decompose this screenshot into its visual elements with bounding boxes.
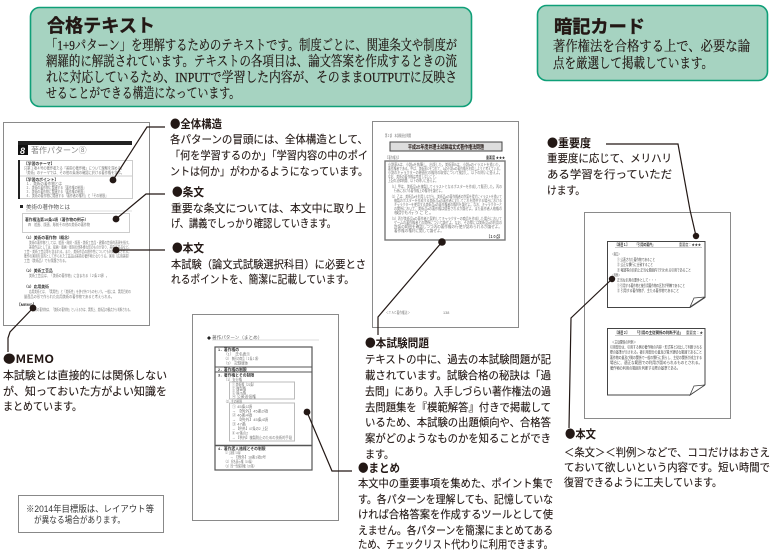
callout: 重要度 bbox=[547, 135, 699, 239]
callout: 本文: れるポイントを、簡潔に記載しています。 bbox=[171, 272, 354, 286]
callout: 全体構造 bbox=[110, 116, 368, 183]
page sample: text page with pattern title: 著作の実用を目的として作られた工芸品は美術の著作物となりうる。実用（応用美術） bbox=[24, 254, 131, 258]
page sample: summary page: → 【例外】複製防止のための技術的手段 bbox=[232, 435, 292, 440]
page sample: past exam question: 第２部 本試験過去問題 bbox=[385, 133, 411, 138]
page sample: text page with pattern title: 量産品の形で作られた応用美術の著作物であると考えられる。 bbox=[24, 294, 114, 299]
page sample: text page with pattern title: 工芸（美術品）でも保護される。 bbox=[24, 258, 68, 263]
panel: 合格テキスト bbox=[30, 8, 472, 106]
text block: 合格テキスト description bbox=[46, 37, 457, 102]
page sample: past exam question: 許諾の範囲を確認しつつ丙の著作権の行使が認められるか論ぜよ。 bbox=[394, 224, 502, 229]
card 1: ＜判例＞ bbox=[612, 272, 620, 278]
page sample: text page with pattern title: 【MEMO】 bbox=[17, 302, 36, 307]
page sample: summary page: ③ 47条 bbox=[232, 422, 246, 426]
page sample: text page with pattern title: 美術作品としては、絵画・版画・彫刻の他多様な形のものがあり、美術工芸品など。 bbox=[29, 244, 131, 250]
panel: 暗記カード bbox=[538, 6, 768, 80]
page sample: past exam question: 複製のポスターを作成する美術品aの著作者に対してこれを提供する場合における bbox=[394, 198, 502, 203]
page sample: text page with pattern title: 著作権法第10条1項（著作物の例示） bbox=[25, 217, 88, 222]
note box bbox=[18, 496, 164, 532]
card 1: ① 引用する著作物と被引用著作物の区別が明瞭であること bbox=[617, 283, 685, 288]
page sample: summary page: ② 46条4項 bbox=[232, 412, 252, 418]
callout: 条文: 重要な条文については、本文中に取り上 bbox=[171, 201, 366, 215]
text block: 合格テキスト description: 網羅的に解説されています。テキストの各項目は、論文答案を作成するときの流 bbox=[46, 53, 457, 70]
page sample: text page with pattern title: ２．美術の著作物に関連する「著作権の制限」 bbox=[26, 185, 86, 190]
page sample: text page with pattern title: １．美術の著作物とは bbox=[26, 181, 62, 186]
callout: まとめ: 本文中の重要事項を集めた、ポイント集で bbox=[358, 476, 553, 490]
page sample: summary page: 1．著作権の bbox=[218, 347, 239, 352]
callout: 本文 (card): ●本文 bbox=[565, 426, 596, 442]
page sample: summary page: ④ 公衆送信権 bbox=[232, 394, 256, 399]
callout: 全体構造: ントは何か」がわかるようになっています。 bbox=[170, 164, 368, 178]
page sample: summary page bbox=[192, 314, 338, 520]
callout: MEMO: ●MEMO bbox=[3, 351, 54, 367]
callout: まとめ: ため、チェックリスト代わりに利用できます。 bbox=[358, 538, 553, 551]
card 1: ③ 報道等の目的上正当な範囲内で行われる引用であること bbox=[617, 268, 691, 272]
page sample: text page with pattern title: 美術の著作物とは bbox=[26, 203, 71, 211]
card 2: 著作物の利用の範囲を判断する際の基準である。 bbox=[610, 366, 680, 370]
page sample: summary page: （1） 氏名表示 bbox=[224, 352, 250, 356]
page sample: text page with pattern title: 工芸・美術工芸品等も含まれる。また、美術作品の創作性についても判断がなされる。 bbox=[24, 249, 131, 254]
page sample: past exam question: キャラクターを使用する美術品aの著作権者の権利を論ぜよ。なお、キャラクターと bbox=[394, 202, 502, 207]
card 2: 際の基準が示される。被引用部分の量及び質が適切な範囲であること bbox=[610, 350, 702, 354]
card 1: 正当な引用の要件として・・・ bbox=[617, 278, 657, 282]
page sample: past exam question: 著作権者である。甲は、美術家Cをつれて、Aの小説aの著作権を利用しようと考えている。 bbox=[388, 166, 502, 171]
page sample: summary page: ① 45条1項 bbox=[232, 404, 252, 409]
text block: 暗記カード description: 点を厳選して掲載しています。 bbox=[553, 55, 713, 72]
card 2: 重要度：★ bbox=[686, 330, 703, 335]
page sample: summary page: （2）主の制限 bbox=[224, 399, 242, 404]
text block: 合格テキスト description: せることができる構造になっています。 bbox=[46, 85, 240, 102]
callout: 本試験問題: 去問題集を『模範解答』付きで掲載して bbox=[365, 400, 551, 414]
card 1: ② 引用する著作物が、主たる著作物であること bbox=[617, 288, 679, 293]
page sample: summary page: （3） 記録媒体 bbox=[224, 360, 248, 366]
leader line bbox=[378, 242, 442, 335]
page sample: text page with pattern title: 美術の著作物は、「美術の著作物」といえるかは、実際上、美術品の観点から判断される。 bbox=[32, 307, 132, 312]
callout: 本文 bbox=[113, 240, 366, 286]
callout: 本文: ●本文 bbox=[172, 240, 204, 256]
page sample: text page with pattern title: 美術の著作物としては、絵画・彫刻・版画・美術工芸品・建築の芸術的表現を指す。 bbox=[29, 240, 131, 245]
callout: 本文: 本試験（論文式試験選択科目）に必要とさ bbox=[171, 257, 366, 271]
card 2: 引用部分は、引用する側の著作物の内容・形式等と対比して判断される bbox=[610, 344, 702, 350]
page sample: summary page: → 【例外】45条2項 bbox=[232, 408, 268, 414]
page sample: text page with pattern title: （2）美術工芸品 bbox=[24, 268, 53, 273]
page sample: summary page: 4．著作者人格権とその制限 bbox=[218, 446, 266, 451]
leader line bbox=[8, 308, 33, 352]
page sample: summary page: ③ 展示権 bbox=[232, 390, 246, 395]
card 2 bbox=[608, 328, 705, 395]
page sample: text page with pattern title: 四 絵画、版画、彫刻その他の美術の著作物 bbox=[28, 222, 90, 227]
callout: まとめ: ければ合格答案を作成するツールとして使 bbox=[358, 507, 553, 521]
callout: 本文 (card) bbox=[564, 276, 770, 489]
page sample: past exam question: （3）丙が美術品aの著作者と契約してキャラクターの商品を作成した場合において bbox=[390, 216, 502, 221]
callout: 全体構造: 各パターンの冒頭には、全体構造として、 bbox=[170, 132, 368, 146]
page sample: past exam question: 【１０点】 bbox=[487, 234, 502, 239]
page sample: past exam question: ＜ＴＡＣ著作権法＞ bbox=[386, 310, 410, 315]
note box: が異なる場合があります。 bbox=[34, 514, 125, 525]
callout: MEMO bbox=[3, 305, 167, 413]
card 2: 著作物の量及び質の関係で一般の慣行に照らし、主従の関係が成立する bbox=[610, 355, 702, 360]
leader line bbox=[116, 194, 165, 219]
page sample: text page with pattern title: 応用美術とは、「実用性」と「美術性」を併せ持つものをいう。一般には、実用目的の bbox=[29, 289, 131, 294]
callout: 本試験問題: テキストの中に、過去の本試験問題が記 bbox=[365, 352, 551, 366]
callout: まとめ bbox=[304, 409, 553, 551]
callout: まとめ: ●まとめ bbox=[358, 460, 400, 476]
callout: まとめ: す。各パターンを理解しても、記憶していな bbox=[358, 492, 553, 506]
leader line bbox=[116, 249, 165, 251]
page sample: past exam question bbox=[372, 122, 518, 328]
page sample: past exam question: 小説のキャラクターの映画化の権利の取得について検討し、以下の問いに答えよ。 bbox=[388, 170, 502, 175]
card 1: ② 公正な慣行に合致すること bbox=[617, 262, 653, 267]
page sample: text page with pattern title: ４．美術の著作物に関連する「著作者の権利」と「その制限」 bbox=[26, 193, 108, 198]
page sample: past exam question: ゲームの著作権者との関係について論ぜよ。なお、その際には美術品aの利用の bbox=[394, 220, 502, 225]
page sample: text page with pattern title: 美術工芸品は、「美術の著作物」に含まれる（２条２項）。 bbox=[29, 273, 109, 278]
page sample: summary page: （2） 無形の商品（２条１項） bbox=[224, 356, 260, 361]
callout: 重要度: ある学習を行っていただ bbox=[547, 167, 672, 181]
callout: 全体構造: ●全体構造 bbox=[170, 116, 222, 132]
page sample: past exam question: 重要度 ★★★ bbox=[486, 155, 505, 160]
page sample: past exam question: 行為における著作権上の権利を論ぜよ。 bbox=[394, 188, 444, 193]
page sample: text page with pattern title: 【学習のポイント】 bbox=[24, 177, 58, 182]
card 2: ＜主従関係の判例＞ bbox=[612, 340, 636, 344]
card 1: ① 公表された著作物であること bbox=[617, 257, 655, 262]
page sample: summary page: 著作パターン（まとめ） bbox=[212, 334, 262, 341]
page sample: memory cards bbox=[584, 212, 730, 418]
callout: 条文: げ、講義でしっかり確認していきます。 bbox=[171, 216, 336, 230]
page sample: text page with pattern title: 8 bbox=[20, 146, 25, 156]
callout: MEMO: が、知っておいた方がよい知識を bbox=[3, 384, 167, 398]
page sample: text page with pattern title: （3）応用美術 bbox=[24, 284, 49, 289]
callout: まとめ: えません。各パターンを簡潔にまとめてある bbox=[358, 523, 553, 537]
page sample: text page with pattern title: 「美術」のテーマでは、その他の条項の確認に於ける著作権を学ぶ。 bbox=[24, 170, 124, 175]
callout: 重要度: 重要度に応じて、メリハリ bbox=[547, 151, 672, 165]
leader line bbox=[307, 412, 352, 471]
callout: 本試験問題: 載されています。試験合格の秘訣は「過 bbox=[365, 368, 551, 382]
callout: 本試験問題: ●本試験問題 bbox=[365, 335, 429, 351]
heading: 暗記カード: 暗記カード bbox=[554, 13, 645, 39]
text block: 合格テキスト description: れに対応しているため、INPUTで学習した内容が、そのままOUTPUTに反映さ bbox=[46, 69, 457, 86]
page sample: past exam question: 【著作権法】 bbox=[386, 155, 400, 160]
page sample: summary page: ② 複製権 bbox=[232, 386, 246, 391]
callout: 本試験問題: ます。 bbox=[365, 448, 394, 461]
heading: 合格テキスト: 合格テキスト bbox=[47, 12, 155, 38]
page sample: text page with pattern title bbox=[4, 122, 150, 326]
page sample: summary page: 3．著作権とその制限 bbox=[218, 372, 254, 378]
text block: 暗記カード description bbox=[553, 38, 750, 72]
callout: 重要度: けます。 bbox=[547, 184, 585, 197]
page sample: past exam question: 検討も行うこと。 bbox=[394, 210, 434, 215]
page sample: text page with pattern title: 【学習のテーマ】 bbox=[24, 161, 54, 166]
note box: ※2014年目標版は、レイアウト等 bbox=[26, 503, 154, 514]
callout: 本試験問題: 去問」にあり。入手しづらい著作権法の過 bbox=[365, 384, 551, 398]
callout: 本試験問題: いるため、本試験の出題傾向や、合格答 bbox=[365, 415, 551, 429]
page sample: past exam question: （1）甲は、美術品aを複製してイラストとなるポスターを作成して販売した。丙の bbox=[390, 184, 502, 189]
callout: 条文: ●条文 bbox=[172, 184, 204, 200]
text block: 合格テキスト description: 「1+9パターン」を理解するためのテキストです。制度ごとに、関連条文や制度が bbox=[46, 37, 457, 54]
callout: 本試験問題: 案がどのようなものかを知ることができ bbox=[365, 431, 551, 445]
callout: 条文 bbox=[113, 184, 366, 230]
callout: 本試験問題 bbox=[365, 238, 551, 461]
card 2: 「引用の主従関係の判断手法」 bbox=[635, 330, 683, 335]
page sample: past exam question: の関係において、美術品aの著作権は侵害されるか論ぜよ。また著作者人格権の bbox=[394, 206, 502, 211]
card 1 bbox=[608, 242, 705, 308]
card 1: 「引用の要件」 bbox=[635, 242, 655, 247]
page sample: past exam question: 平成25年度弁理士試験論文式著作権法問題 bbox=[408, 143, 484, 151]
page sample: text page with pattern title: 著作パターン⑧ bbox=[31, 145, 87, 155]
callout: 本文 (card): 復習できるように工夫しています。 bbox=[564, 476, 722, 489]
page sample: summary page: → 【例外】47条の2 上記 bbox=[232, 426, 268, 431]
page sample: past exam question: 著作権の権利に関して論ぜよ。 bbox=[394, 228, 444, 233]
page sample: summary page: （3）同一性保持権（20条） bbox=[224, 464, 256, 468]
callout: 重要度: ●重要度 bbox=[547, 135, 591, 151]
page sample: summary page: ① 美術権（21条） bbox=[232, 382, 256, 387]
page sample: text page with pattern title: 只第１項４号の著作者たる「美術の著作権」について理解を深める。 bbox=[24, 166, 124, 170]
page sample: summary page: → 【例外】18条1項3号 bbox=[230, 454, 266, 460]
page sample: summary page: （1）公表権（18条） bbox=[224, 450, 242, 455]
card 2: 【項目２】 bbox=[615, 330, 629, 335]
page sample: past exam question: 138 bbox=[443, 311, 449, 315]
page sample: summary page: ④ 47条の2 bbox=[232, 430, 248, 436]
card 2: 場合に、適正な範囲での利用が認められるものとされる。 bbox=[610, 360, 702, 365]
card 1: 重要度：★★★ bbox=[679, 242, 701, 247]
card 1: ＜条文＞ bbox=[612, 252, 620, 256]
callout: MEMO: まとめています。 bbox=[3, 400, 82, 413]
page sample: past exam question: なお、美術の著作権は考慮しないこと。 bbox=[388, 174, 438, 179]
page sample: past exam question: 小説家Aは、小説aを執筆し、出版した。美術家Bは、小説aのイラストを描いた。 bbox=[388, 162, 502, 167]
page sample: summary page: 2．著作権の制限 bbox=[218, 367, 247, 372]
page sample: summary page: → 【例外】45条4項 bbox=[232, 417, 268, 422]
leader line bbox=[569, 279, 612, 428]
text block: 暗記カード description: 著作権法を合格する上で、必要な論 bbox=[553, 38, 750, 55]
page sample: text page with pattern title: （1）美術の著作物（概念） bbox=[24, 235, 72, 240]
page sample: summary page: （1）支分権 bbox=[224, 377, 242, 382]
page sample: past exam question: （2）乙は、美術品aを利用しながら、美術品aの著作権者の許諾を得ずにイラストを描いて bbox=[390, 194, 502, 199]
callout: MEMO: 本試験とは直接的には関係しない bbox=[3, 368, 167, 382]
page sample: past exam question: 上記の法律問題、以下の問いに答えよ。 bbox=[388, 178, 438, 183]
page sample: summary page: （2）氏名表示権（19条） bbox=[224, 459, 254, 464]
leader line bbox=[113, 127, 165, 180]
card 1: 【項目１】 bbox=[615, 242, 629, 247]
leader line bbox=[606, 144, 696, 236]
callout: 全体構造: 「何を学習するのか」「学習内容の中のポイ bbox=[170, 148, 368, 162]
page sample: text page with pattern title: ３．美術の著作物に関連する「著作権の制限」 bbox=[26, 189, 86, 194]
